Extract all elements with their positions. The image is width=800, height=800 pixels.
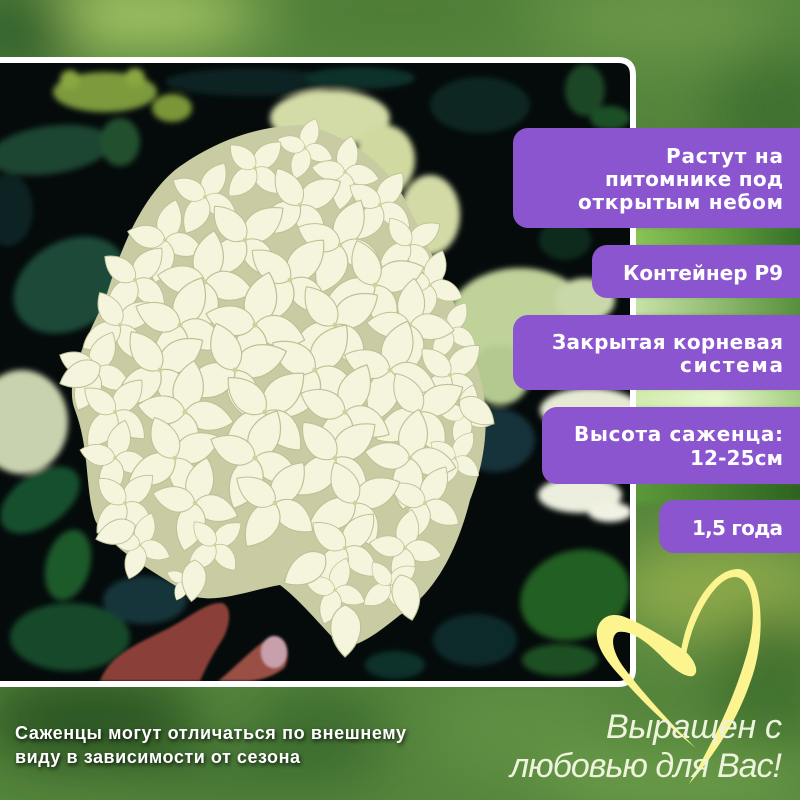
disclaimer note: виду в зависимости от сезона xyxy=(15,747,301,767)
info pill: height: Высота саженца: xyxy=(574,422,783,446)
info pill: container: Контейнер Р9 xyxy=(623,261,783,285)
info pill: grown outdoors xyxy=(513,128,800,228)
slogan: Выращен с xyxy=(606,708,782,746)
panel: hydrangea photo xyxy=(0,63,643,681)
info pill: root system: система xyxy=(680,353,783,377)
slogan xyxy=(508,714,782,778)
protruding outer petals xyxy=(55,354,501,657)
background leaves xyxy=(0,64,643,679)
info pill: root system: Закрытая корневая xyxy=(552,330,783,354)
white photo frame xyxy=(0,60,633,684)
yellow-green background flowers xyxy=(53,68,192,122)
disclaimer note xyxy=(15,723,406,767)
slogan: любовью для Вас! xyxy=(508,747,783,785)
info pill: grown outdoors: питомнике под xyxy=(605,167,783,191)
info pill: grown outdoors: Растут на xyxy=(666,144,783,168)
info pill: root system xyxy=(513,315,800,390)
hand holding the flower xyxy=(100,603,288,681)
info pill: age: 1,5 года xyxy=(692,516,783,540)
info pill: container xyxy=(592,245,800,298)
background hydrangea clusters xyxy=(0,90,640,522)
light bands on the right xyxy=(625,226,800,503)
icon: yellow heart xyxy=(597,569,761,784)
info pill: height: 12-25см xyxy=(690,446,783,470)
info pill: age xyxy=(659,500,800,553)
info pill: grown outdoors: открытым небом xyxy=(578,190,783,214)
disclaimer note: Саженцы могут отличаться по внешнему xyxy=(15,723,406,743)
hydrangea flower head xyxy=(41,109,508,657)
info pill: height xyxy=(542,407,800,484)
